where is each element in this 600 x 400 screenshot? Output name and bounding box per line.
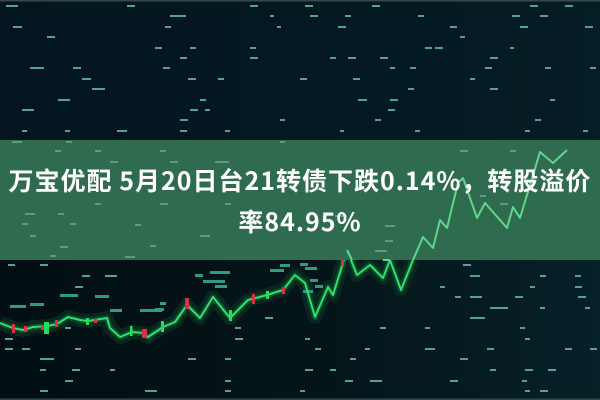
glow under price line: [0, 250, 413, 337]
title: 万宝优配 5月20日台21转债下跌0.14%，转股溢价: [9, 162, 591, 198]
band ticker marks: [12, 141, 516, 258]
title: 率84.95%: [238, 203, 362, 239]
floating labels above chart: [10, 254, 323, 312]
title: [9, 162, 591, 239]
title band: [0, 140, 600, 260]
price line chart: [0, 250, 413, 338]
price line seen through band: [347, 150, 567, 260]
